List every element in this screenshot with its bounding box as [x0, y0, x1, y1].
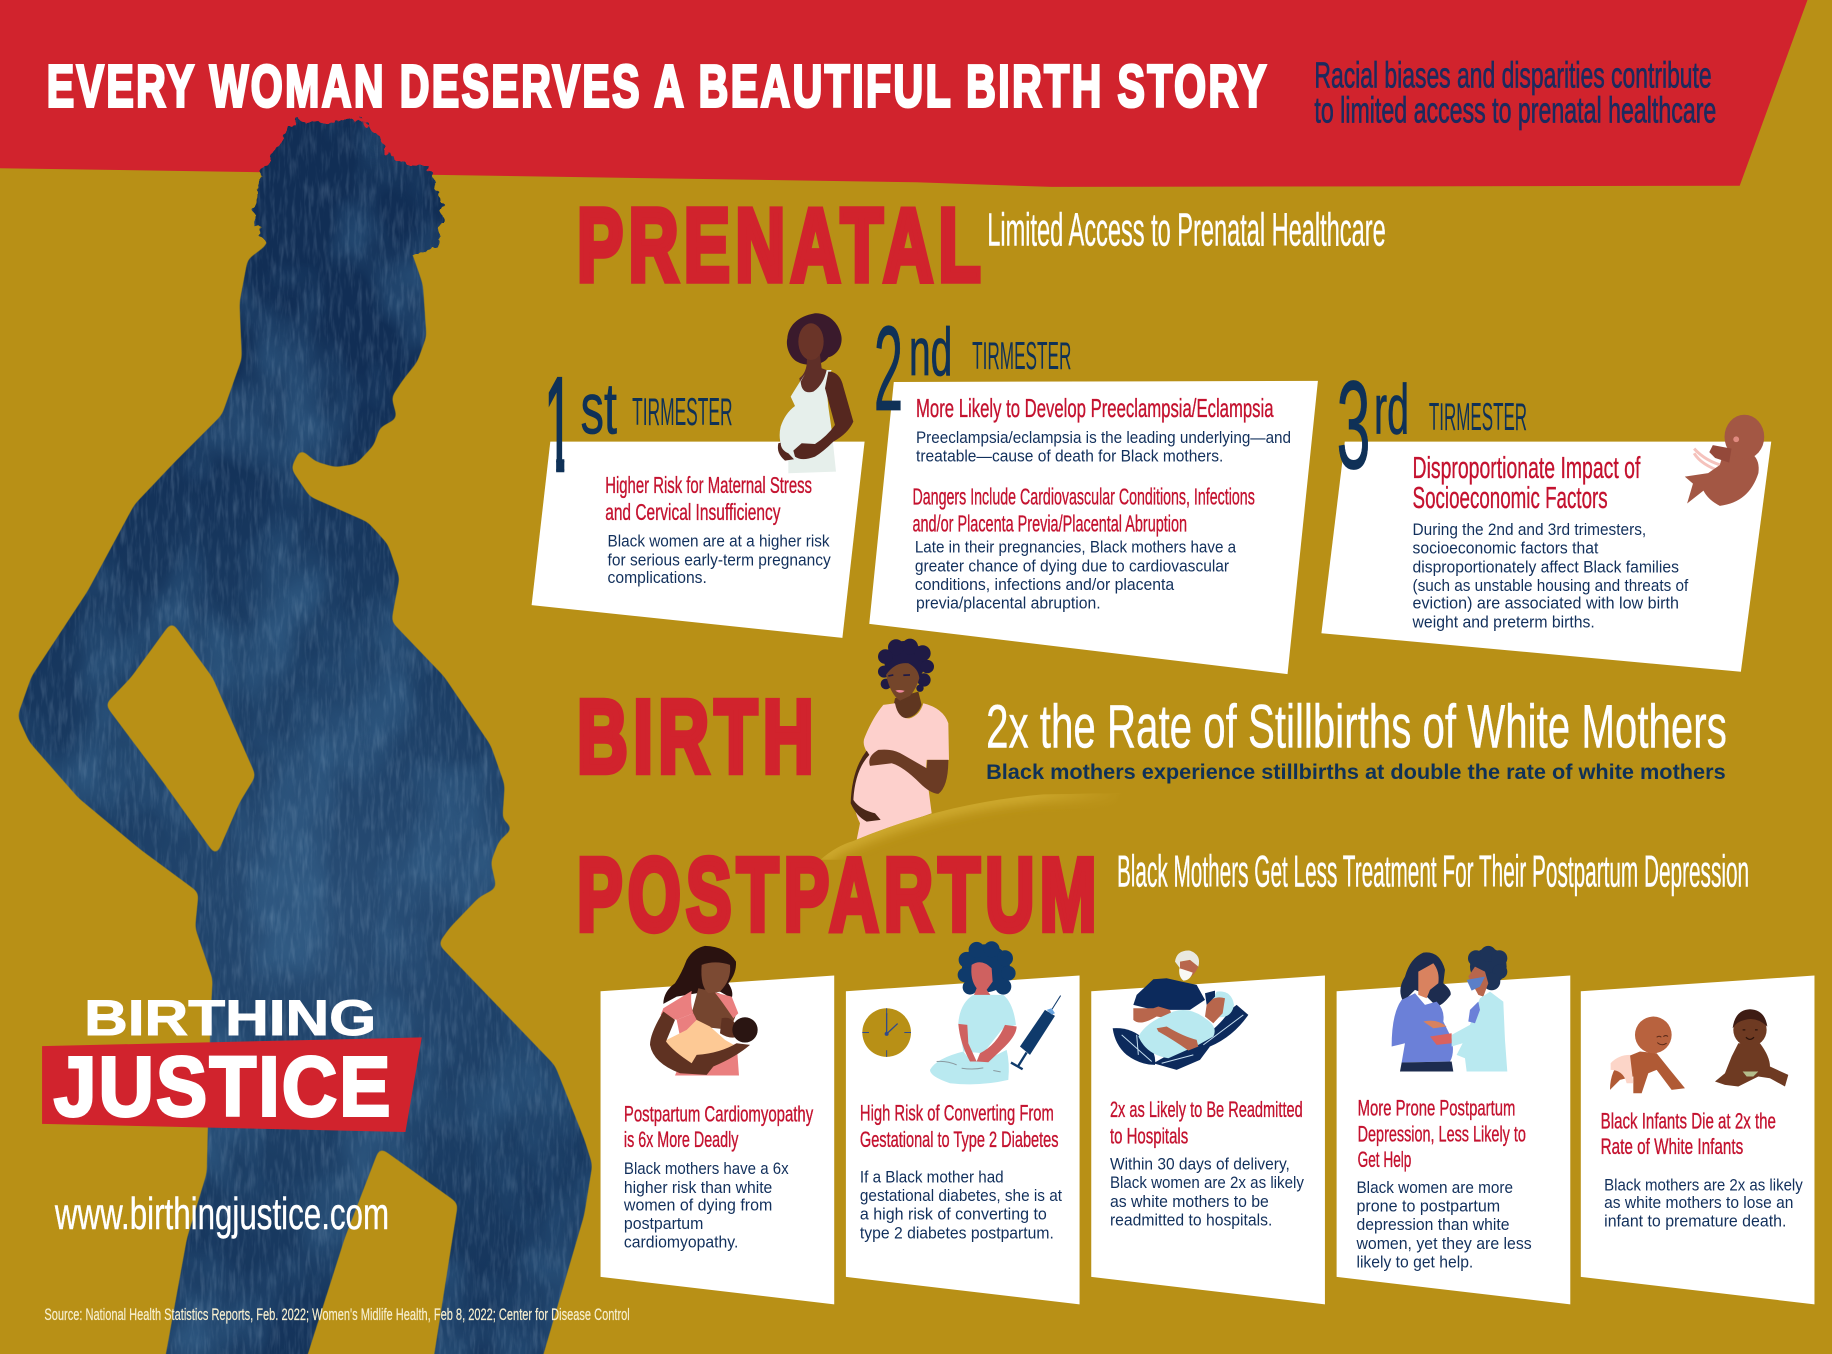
panel: 3rd trimester — [1321, 442, 1771, 672]
2nd trimester text: greater chance of dying due to cardiovascular — [915, 557, 1230, 575]
diabetes text: If a Black mother had — [860, 1168, 1004, 1186]
cardiomyopathy text: women of dying from — [623, 1196, 772, 1214]
icon: breastfeeding mother — [650, 946, 758, 1076]
2nd trimester text: Dangers Include Cardiovascular Conditions, Infections — [912, 484, 1255, 510]
depression text: women, yet they are less — [1356, 1235, 1532, 1253]
header band — [0, 0, 1807, 187]
depression text: More Prone Postpartum — [1358, 1096, 1515, 1121]
3rd trimester text: disproportionately affect Black families — [1413, 558, 1679, 576]
icon: fetus — [1685, 415, 1764, 506]
2nd trimester text: More Likely to Develop Preeclampsia/Eclampsia — [916, 395, 1274, 423]
cardiomyopathy text: Black mothers have a 6x — [624, 1160, 789, 1178]
2nd trimester text — [912, 395, 1291, 613]
readmission text: Within 30 days of delivery, — [1110, 1155, 1290, 1173]
infants text — [1601, 1109, 1804, 1231]
cardiomyopathy text — [623, 1102, 814, 1252]
2nd trimester text: Preeclampsia/eclampsia is the leading underlying—and — [916, 429, 1291, 447]
1st trimester text: complications. — [608, 569, 707, 587]
1st trimester text — [605, 472, 831, 587]
readmission text: readmitted to hospitals. — [1110, 1211, 1272, 1229]
readmission text: as white mothers to be — [1110, 1193, 1269, 1211]
1st trimester text: Black women are at a higher risk — [608, 533, 830, 551]
readmission text: to Hospitals — [1110, 1124, 1188, 1149]
2nd trimester text: previa/placental abruption. — [916, 595, 1101, 613]
icon: pregnant woman in white dress — [778, 313, 853, 473]
diabetes text: Gestational to Type 2 Diabetes — [860, 1127, 1059, 1152]
readmission text: 2x as Likely to Be Readmitted — [1110, 1097, 1303, 1122]
3rd trimester text: Socioeconomic Factors — [1413, 482, 1608, 515]
diabetes text — [860, 1100, 1062, 1242]
1st trimester text: and Cervical Insufficiency — [605, 499, 781, 525]
depression text: Get Help — [1358, 1147, 1411, 1172]
1st trimester label: st — [581, 368, 617, 449]
depression text: likely to get help. — [1356, 1254, 1473, 1272]
cardiomyopathy text: Postpartum Cardiomyopathy — [624, 1102, 814, 1127]
gold hill — [821, 794, 1092, 860]
text: TIRMESTER — [1429, 396, 1527, 439]
silhouette of pregnant woman — [0, 105, 608, 1354]
logo: birthing justice — [42, 990, 422, 1134]
panel: depression — [1337, 946, 1570, 1304]
panel: infants — [1581, 975, 1814, 1304]
panel: diabetes — [846, 941, 1080, 1304]
infants text: as white mothers to lose an — [1604, 1194, 1793, 1212]
2nd trimester text: Late in their pregnancies, Black mothers have a — [915, 539, 1237, 557]
diabetes text: type 2 diabetes postpartum. — [860, 1224, 1054, 1242]
panel: 1st trimester — [532, 442, 865, 638]
diabetes text: gestational diabetes, she is at — [860, 1187, 1062, 1205]
3rd trimester text: Disproportionate Impact of — [1413, 452, 1641, 485]
website url: www.birthingjustice.com — [54, 1190, 389, 1239]
cardiomyopathy text: is 6x More Deadly — [624, 1127, 739, 1152]
3rd trimester label: rd — [1374, 370, 1409, 448]
depression text — [1356, 1096, 1532, 1272]
diabetes text: a high risk of converting to — [860, 1206, 1047, 1224]
1st trimester label — [548, 376, 732, 472]
depression text: depression than white — [1356, 1216, 1510, 1234]
cardiomyopathy text: cardiomyopathy. — [624, 1234, 738, 1252]
logo: birthing justice: BIRTHING — [84, 990, 376, 1046]
1st trimester label: 1 — [544, 350, 572, 500]
diabetes text: High Risk of Converting From — [860, 1100, 1054, 1125]
1st trimester text: for serious early-term pregnancy — [608, 551, 831, 569]
heading: postpartum: POSTPARTUM — [577, 837, 1102, 952]
icon: pregnant woman in pink dress — [851, 639, 949, 840]
panel: readmission — [1091, 951, 1325, 1304]
icon: patient and masked doctor — [1392, 946, 1507, 1072]
2nd trimester text: treatable—cause of death for Black mothers. — [916, 447, 1223, 465]
header subtitle — [1314, 55, 1716, 131]
depression text: Black women are more — [1356, 1179, 1513, 1197]
2nd trimester text: conditions, infections and/or placenta — [915, 576, 1175, 594]
3rd trimester text: (such as unstable housing and threats of — [1413, 577, 1689, 595]
3rd trimester text: eviction) are associated with low birth — [1413, 595, 1679, 613]
infants text: Black mothers are 2x as likely — [1604, 1176, 1804, 1194]
3rd trimester text — [1412, 452, 1689, 631]
3rd trimester label: 3 — [1337, 356, 1370, 495]
text: TIRMESTER — [632, 391, 733, 434]
panel: 2nd trimester — [869, 381, 1318, 674]
depression text: prone to postpartum — [1356, 1197, 1500, 1215]
readmission text: Black women are 2x as likely — [1110, 1174, 1305, 1192]
1st trimester text: Higher Risk for Maternal Stress — [605, 472, 812, 498]
cardiomyopathy text: postpartum — [624, 1215, 703, 1233]
prenatal subheading: Limited Access to Prenatal Healthcare — [987, 203, 1386, 255]
infants text: Rate of White Infants — [1601, 1134, 1743, 1159]
2nd trimester label — [874, 302, 1071, 436]
panel: cardiomyopathy — [601, 946, 834, 1304]
text: TIRMESTER — [972, 335, 1071, 378]
icon: clock and seated woman with syringe — [862, 941, 1061, 1084]
3rd trimester text: During the 2nd and 3rd trimesters, — [1413, 521, 1646, 539]
birth subheading: Black mothers experience stillbirths at double the rate of white mothers — [986, 761, 1726, 784]
infants text: infant to premature death. — [1604, 1213, 1786, 1231]
3rd trimester text: weight and preterm births. — [1412, 613, 1595, 631]
2nd trimester label: nd — [909, 315, 952, 390]
icon: patient and caregiver — [1113, 951, 1248, 1070]
2nd trimester label: 2 — [874, 302, 903, 436]
depression text: Depression, Less Likely to — [1358, 1121, 1526, 1146]
3rd trimester text: socioeconomic factors that — [1413, 540, 1599, 558]
2nd trimester text: and/or Placenta Previa/Placental Abruption — [912, 511, 1187, 537]
readmission text — [1110, 1097, 1305, 1229]
source line: Source: National Health Statistics Reports, Feb. 2022; Women's Midlife Health, Feb 8, 2022; Center for Disease Control — [44, 1306, 630, 1324]
cardiomyopathy text: higher risk than white — [624, 1179, 772, 1197]
title: EVERY WOMAN DESERVES A BEAUTIFUL BIRTH STORY — [47, 52, 1269, 119]
heading: birth: BIRTH — [577, 679, 819, 794]
logo: birthing justice: JUSTICE — [54, 1040, 393, 1134]
heading: prenatal: PRENATAL — [577, 187, 986, 302]
icon: two babies — [1610, 1009, 1788, 1093]
3rd trimester label — [1337, 356, 1527, 495]
